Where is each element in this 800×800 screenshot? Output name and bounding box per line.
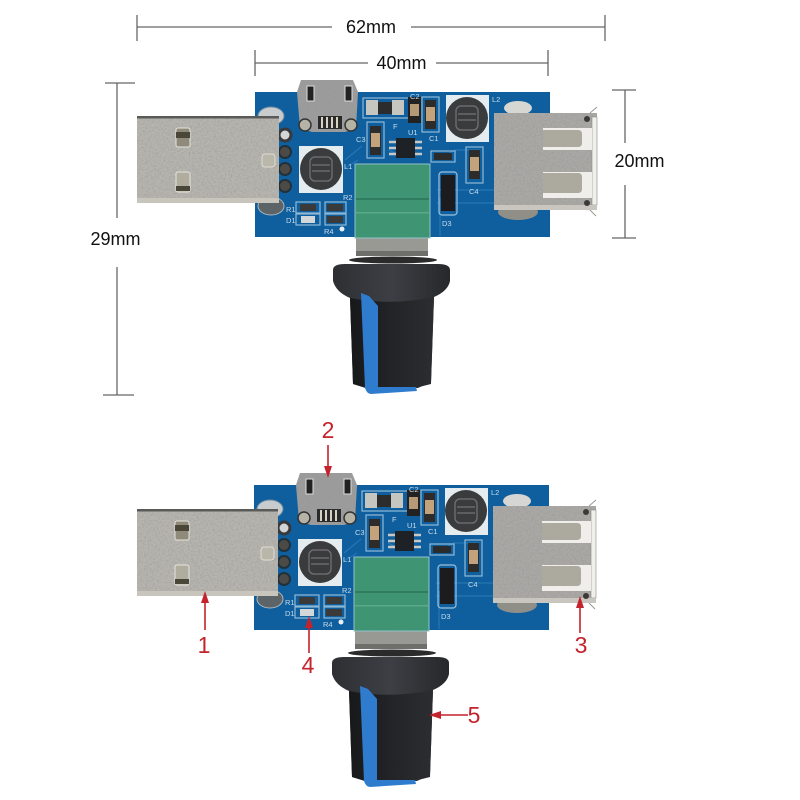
silkscreen labels: L2 — [492, 95, 500, 104]
rotary knob — [333, 256, 450, 394]
silkscreen labels — [286, 92, 500, 236]
silkscreen labels: R1 — [286, 205, 296, 214]
inductor L1 — [298, 539, 342, 586]
silkscreen labels: U1 — [407, 521, 417, 530]
USB A socket — [494, 101, 597, 220]
resistors and LED R1 R2 R4 D1 — [296, 202, 346, 232]
dimension: 29mm overall height: 29mm — [90, 229, 141, 249]
dimension: 20mm board height: 20mm — [614, 151, 665, 171]
silkscreen labels: D1 — [285, 609, 295, 618]
silkscreen labels — [285, 485, 499, 629]
silkscreen labels: C4 — [469, 187, 479, 196]
silkscreen labels: R4 — [324, 227, 334, 236]
micro USB connector — [297, 80, 358, 132]
product photo: top module — [137, 80, 597, 394]
resistor R3 — [430, 544, 454, 555]
inductor L2 — [446, 95, 489, 142]
silkscreen labels: F — [392, 515, 397, 524]
USB A plug — [137, 116, 279, 203]
diode D3 — [439, 172, 457, 215]
silkscreen labels: L1 — [344, 162, 352, 171]
resistor R3 — [431, 151, 455, 162]
silkscreen labels: C4 — [468, 580, 478, 589]
chip U1 — [388, 531, 421, 551]
resistors and LED R1 R2 R4 D1 — [295, 595, 345, 624]
silkscreen labels: L2 — [491, 488, 499, 497]
callout 1: USB plug — [198, 591, 210, 658]
diode D3 — [438, 565, 456, 608]
circuit board — [255, 92, 550, 237]
fuse F — [363, 98, 420, 118]
silkscreen labels: C3 — [356, 135, 366, 144]
potentiometer: green housing and bracket — [354, 557, 429, 649]
dimension: 40mm board length: 40mm — [376, 53, 427, 73]
callout 4: LED: 4 — [302, 652, 315, 678]
callout 5: knob: 5 — [468, 702, 480, 728]
product photo: bottom module with callouts — [137, 473, 596, 787]
chip U1 — [389, 138, 422, 158]
callout 4: LED — [302, 616, 315, 678]
silkscreen labels: C1 — [429, 134, 439, 143]
potentiometer: green housing and bracket — [355, 164, 430, 256]
silkscreen labels: R2 — [342, 586, 352, 595]
callout 2: micro USB: 2 — [322, 417, 334, 443]
callout 3: USB socket — [575, 596, 587, 658]
inductor L1 — [299, 146, 343, 193]
dimension: 40mm board length — [255, 50, 548, 76]
micro USB connector — [296, 473, 357, 525]
silkscreen labels: C2 — [410, 92, 420, 101]
capacitors C1 C2 C3 C4 — [366, 490, 482, 576]
callout 1: USB plug: 1 — [198, 632, 210, 658]
dimension: 62mm overall length: 62mm — [346, 17, 396, 37]
USB A plug — [137, 509, 278, 596]
callout 5: knob — [429, 702, 480, 728]
dimension: 62mm overall length — [137, 15, 605, 41]
silkscreen labels: D3 — [442, 219, 452, 228]
silkscreen labels: C2 — [409, 485, 419, 494]
silkscreen labels: F — [393, 122, 398, 131]
silkscreen labels: C3 — [355, 528, 365, 537]
silkscreen labels: R1 — [285, 598, 295, 607]
silkscreen labels: R2 — [343, 193, 353, 202]
dimension: 29mm overall height — [90, 83, 141, 395]
callout 2: micro USB — [322, 417, 334, 478]
silkscreen labels: U1 — [408, 128, 418, 137]
circuit board — [254, 485, 549, 630]
silkscreen labels: R4 — [323, 620, 333, 629]
inductor L2 — [445, 488, 488, 535]
silkscreen labels: D1 — [286, 216, 296, 225]
USB A socket — [493, 494, 596, 613]
dimension: 20mm board height — [612, 90, 665, 238]
callout 3: USB socket: 3 — [575, 632, 587, 658]
capacitors C1 C2 C3 C4 — [367, 97, 483, 183]
rotary knob — [332, 650, 449, 787]
fuse F — [362, 491, 419, 511]
silkscreen labels: D3 — [441, 612, 451, 621]
silkscreen labels: C1 — [428, 527, 438, 536]
silkscreen labels: L1 — [343, 555, 351, 564]
